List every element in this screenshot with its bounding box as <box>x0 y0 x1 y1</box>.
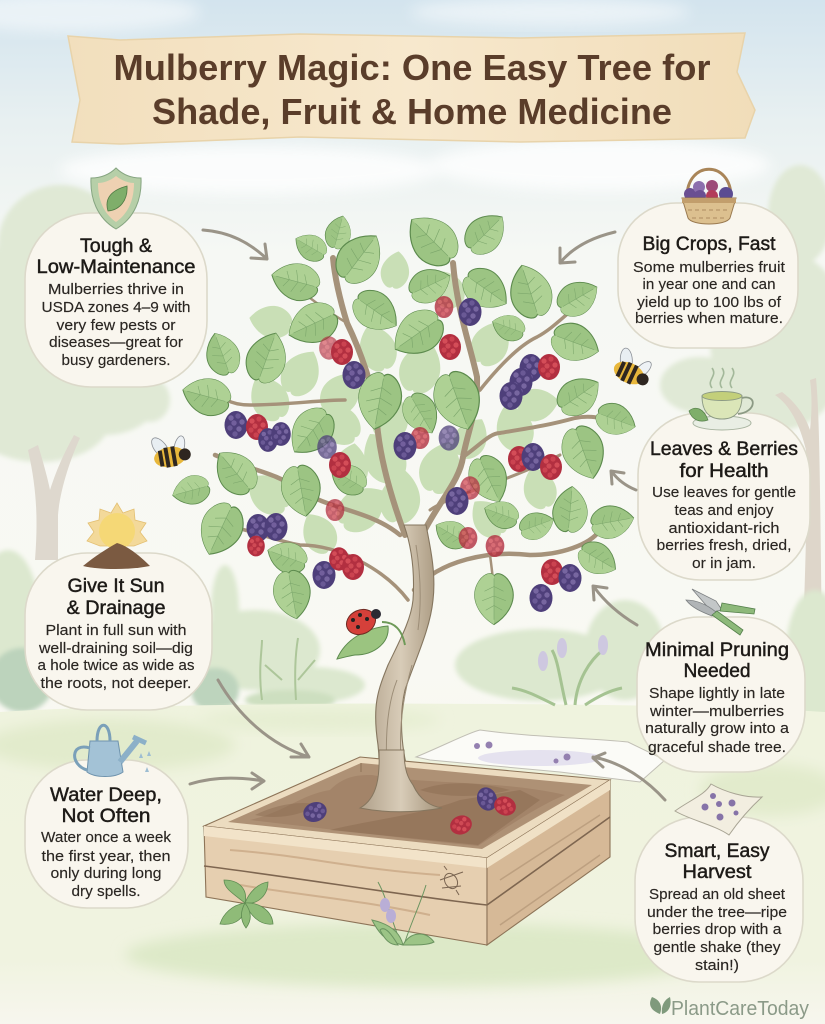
tree: berries <box>224 296 582 612</box>
bee left <box>147 430 192 470</box>
callout: Give It Sun & Drainage: Plant in full sun with <box>46 622 186 639</box>
callout: Leaves & Berries for Health: or in jam. <box>692 555 756 572</box>
callout: Minimal Pruning Needed: graceful shade tree. <box>648 739 786 756</box>
callout: Smart, Easy Harvest <box>635 784 803 982</box>
arrow to sheet from Harvest <box>593 753 665 800</box>
callout: Smart, Easy Harvest: Harvest <box>682 862 752 883</box>
bellflower plant <box>372 882 434 945</box>
callout: Water Deep, Not Often: Water once a week <box>41 829 172 846</box>
callout: Big Crops, Fast: Some mulberries fruit <box>633 259 786 276</box>
arrow to bed from Water <box>190 773 264 789</box>
title text: Shade, Fruit & Home Medicine <box>152 91 672 132</box>
callout: Smart, Easy Harvest: Spread an old sheet <box>649 886 786 903</box>
callout: Give It Sun & Drainage: & Drainage <box>66 598 166 619</box>
icon: shield with leaf <box>91 168 141 229</box>
callout: Smart, Easy Harvest: Smart, Easy <box>664 841 770 862</box>
callout: Minimal Pruning Needed: winter—mulberries <box>649 703 784 720</box>
icon: pruners <box>686 589 755 635</box>
arrow to tree from Big Crops <box>560 232 615 263</box>
old sheet on the ground with fallen berries <box>416 730 665 782</box>
title text <box>114 47 710 132</box>
callout: Leaves & Berries for Health: antioxidant-rich <box>668 520 780 537</box>
background shrubs and lawn <box>0 550 825 1024</box>
arrow to tree from Pruning <box>593 586 637 625</box>
background tree left <box>0 185 170 560</box>
callout: Tough & Low-Maintenance <box>25 168 207 387</box>
callout: Give It Sun & Drainage <box>25 503 212 710</box>
callout: Leaves & Berries for Health <box>638 368 810 580</box>
callout: Tough & Low-Maintenance: Tough & <box>80 236 152 257</box>
callout: Give It Sun & Drainage: well-draining soil—dig <box>38 640 193 657</box>
bed back rim and soil <box>204 757 610 858</box>
icon: watering can <box>75 725 151 776</box>
callout: Minimal Pruning Needed <box>637 589 805 772</box>
callout: Smart, Easy Harvest: under the tree—ripe <box>647 904 787 921</box>
tree: trunk <box>360 525 442 812</box>
callout: Tough & Low-Maintenance: USDA zones 4–9 with <box>42 299 190 316</box>
callout: Give It Sun & Drainage: Give It Sun <box>68 576 164 597</box>
callout: Tough & Low-Maintenance: diseases—great for <box>49 334 183 351</box>
arrow to tree from Tough <box>203 230 267 259</box>
mint plant <box>220 880 273 928</box>
bee upper right <box>608 343 658 391</box>
bed right panel <box>487 780 610 945</box>
icon: berry basket <box>682 169 736 224</box>
tree: branches <box>210 258 612 600</box>
tree: pale background leaves <box>238 249 562 559</box>
callout: Smart, Easy Harvest: gentle shake (they <box>654 939 781 956</box>
callout: Big Crops, Fast: yield up to 100 lbs of <box>637 294 782 311</box>
callout: Water Deep, Not Often: Water Deep, <box>50 785 162 806</box>
trunk base flare <box>360 750 442 812</box>
callout: Minimal Pruning Needed: Needed <box>684 661 750 682</box>
background tree right <box>660 165 825 640</box>
icon: tea cup <box>689 368 753 430</box>
callout: Leaves & Berries for Health: teas and enjoy <box>674 502 774 519</box>
callout: Tough & Low-Maintenance: very few pests or <box>56 317 176 334</box>
icon: folded sheet with berries <box>675 784 762 835</box>
logo: PlantCareToday: PlantCareToday <box>671 998 809 1020</box>
callout: Leaves & Berries for Health: Use leaves for gentle <box>652 484 796 501</box>
arrow to bed from Give It Sun <box>218 680 309 757</box>
callout: Big Crops, Fast: in year one and can <box>642 276 776 293</box>
callout: Water Deep, Not Often: the first year, then <box>42 848 170 865</box>
callout: Big Crops, Fast: Big Crops, Fast <box>642 234 776 255</box>
callout: Minimal Pruning Needed: Minimal Pruning <box>645 640 789 661</box>
callout: Tough & Low-Maintenance: Low-Maintenance <box>36 257 196 278</box>
ladybug on leaf <box>337 605 405 659</box>
callout: Leaves & Berries for Health: berries fresh, dried, <box>656 537 792 554</box>
arrow to tree from Leaves <box>611 471 636 490</box>
callout: Leaves & Berries for Health: Leaves & Berries <box>650 439 798 460</box>
berries on soil <box>300 799 330 825</box>
tree: leaves <box>169 205 640 624</box>
icon: sun over soil <box>83 503 150 569</box>
callout: Big Crops, Fast <box>618 169 798 348</box>
callout: Minimal Pruning Needed: naturally grow into a <box>645 720 790 737</box>
callout: Water Deep, Not Often: Not Often <box>62 806 150 827</box>
callout: Smart, Easy Harvest: berries drop with a <box>652 921 782 938</box>
callout: Give It Sun & Drainage: the roots, not deeper. <box>40 675 192 692</box>
callout: Leaves & Berries for Health: for Health <box>680 461 768 482</box>
callout: Water Deep, Not Often: only during long <box>50 865 162 882</box>
callout: Water Deep, Not Often: dry spells. <box>72 883 140 900</box>
callout: Smart, Easy Harvest: stain!) <box>695 957 739 974</box>
beetle carving <box>440 866 463 895</box>
raised wooden bed <box>204 750 610 945</box>
callout: Tough & Low-Maintenance: Mulberries thrive in <box>48 281 184 298</box>
callout: Water Deep, Not Often <box>25 725 188 908</box>
callout: Give It Sun & Drainage: a hole twice as wide as <box>38 657 194 674</box>
title text: Mulberry Magic: One Easy Tree for <box>114 47 710 88</box>
title banner <box>68 33 755 144</box>
callout: Big Crops, Fast: berries when mature. <box>635 310 783 327</box>
callout: Minimal Pruning Needed: Shape lightly in late <box>649 685 785 702</box>
bed front panel <box>204 826 487 945</box>
callout: Tough & Low-Maintenance: busy gardeners. <box>62 352 170 369</box>
